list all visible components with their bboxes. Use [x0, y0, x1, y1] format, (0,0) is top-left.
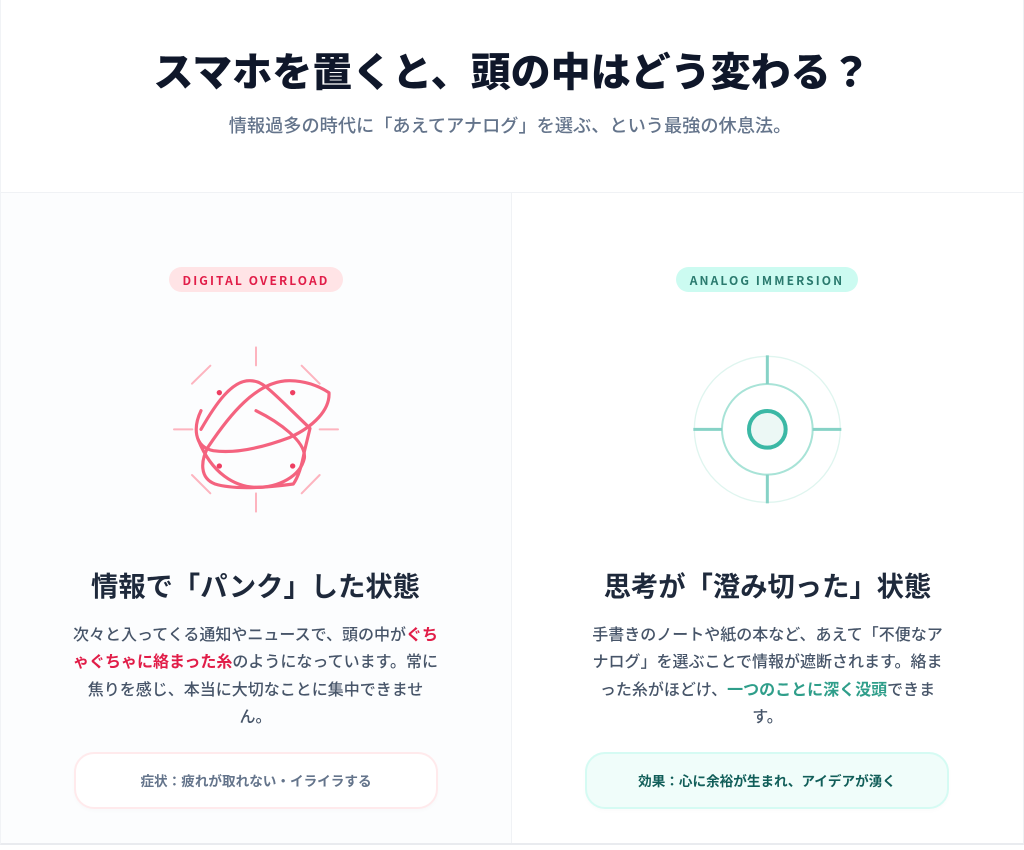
body text: digital: ゃぐちゃに絡まった糸のようになっています。常に: [73, 648, 438, 672]
callout: effect: 効果：心に余裕が生まれ、アイデアが湧く: [638, 770, 896, 790]
icon: tangled thread: [173, 346, 339, 512]
subtitle: 情報過多の時代に「あえてアナログ」を選ぶ、という最強の休息法。: [229, 112, 791, 138]
badge: analog immersion: [676, 267, 858, 292]
badge: digital overload: [169, 267, 343, 292]
body text: analog: 手書きのノートや紙の本など、あえて「不便なア: [592, 621, 943, 645]
body text: analog: す。: [752, 703, 783, 727]
body text: analog: [592, 621, 943, 727]
body text: digital: 次々と入ってくる通知やニュースで、頭の中がぐち: [73, 621, 438, 645]
panel: digital overload: [1, 193, 511, 843]
callout: symptoms: 症状：疲れが取れない・イライラする: [140, 770, 372, 790]
title: スマホを置くと、頭の中はどう変わる？: [153, 40, 871, 98]
badge: digital overload: DIGITAL OVERLOAD: [183, 272, 329, 289]
callout: symptoms: [74, 752, 438, 809]
body text: digital: [73, 621, 438, 727]
body text: digital: ん。: [239, 703, 272, 727]
callout: effect: [585, 752, 949, 809]
badge: analog immersion: ANALOG IMMERSION: [690, 272, 844, 289]
divider center: [511, 193, 512, 843]
heading: digital: 情報で「パンク」した状態: [91, 564, 420, 604]
divider header: [1, 192, 1023, 193]
body text: analog: ナログ」を選ぶことで情報が遮断されます。絡ま: [593, 648, 942, 672]
heading: analog: 思考が「澄み切った」状態: [604, 564, 931, 604]
icon: focus target: [693, 355, 842, 504]
body text: digital: 焦りを感じ、本当に大切なことに集中できませ: [88, 676, 423, 700]
body text: analog: った糸がほどけ、一つのことに深く没頭できま: [600, 676, 935, 700]
